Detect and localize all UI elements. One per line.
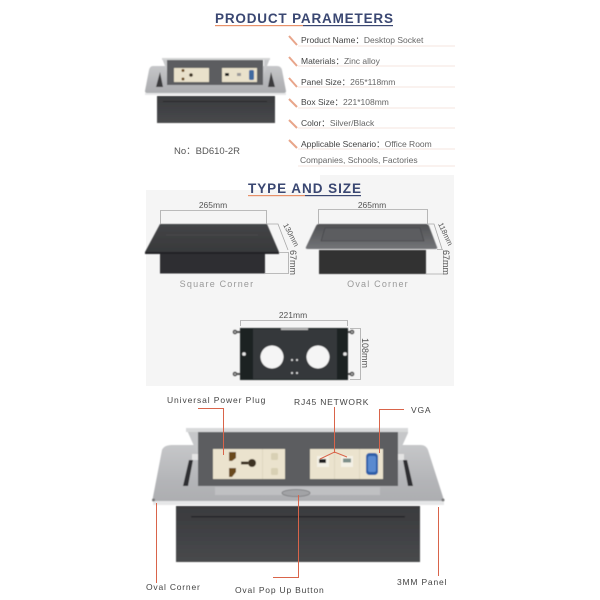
product photo: desktop socket xyxy=(145,58,286,123)
label: vga: VGA xyxy=(411,405,431,415)
oval corner socket: 67mm xyxy=(441,250,451,275)
oval corner socket: 265mm xyxy=(358,200,386,210)
box drawing: 221 by 108: 221mm xyxy=(279,310,307,320)
square corner socket: 265mm xyxy=(199,200,227,210)
parameter list: Color：Silver/Black xyxy=(301,118,375,128)
model number: No：BD610-2R xyxy=(174,146,240,157)
label: universal power plug: Universal Power Plug xyxy=(167,395,266,405)
box drawing: 221 by 108 xyxy=(234,310,370,380)
label: rj45 network: RJ45 NETWORK xyxy=(294,397,369,407)
label: 3mm panel: 3MM Panel xyxy=(397,577,447,587)
label: oval pop up button: Oval Pop Up Button xyxy=(235,585,325,595)
title: type and size: TYPE AND SIZE xyxy=(248,181,361,196)
oval corner socket: 118mm xyxy=(436,221,455,247)
box drawing: 221 by 108: 108mm xyxy=(360,338,370,368)
square corner socket xyxy=(145,200,301,289)
square corner socket: 67mm xyxy=(288,250,298,275)
label: oval corner: Oval Corner xyxy=(146,582,201,592)
parameter list: Panel Size：265*118mm xyxy=(301,77,395,87)
oval corner socket: Oval Corner xyxy=(347,279,409,289)
square corner socket: 130mm xyxy=(281,222,301,248)
parameter list: Companies, Schools, Factories xyxy=(300,155,418,165)
callouts with leader lines xyxy=(156,407,438,583)
title: product parameters: PRODUCT PARAMETERS xyxy=(215,11,393,26)
main product photo xyxy=(152,428,444,562)
parameter list xyxy=(289,35,455,166)
parameter list: Applicable Scenario：Office Room xyxy=(301,139,432,149)
parameter list: Materials：Zinc alloy xyxy=(301,56,381,66)
parameter list: Box Size：221*108mm xyxy=(301,97,389,107)
square corner socket: Square Corner xyxy=(180,279,254,289)
background panel: type and size xyxy=(146,175,454,386)
oval corner socket xyxy=(306,200,455,289)
parameter list: Product Name：Desktop Socket xyxy=(301,35,424,45)
